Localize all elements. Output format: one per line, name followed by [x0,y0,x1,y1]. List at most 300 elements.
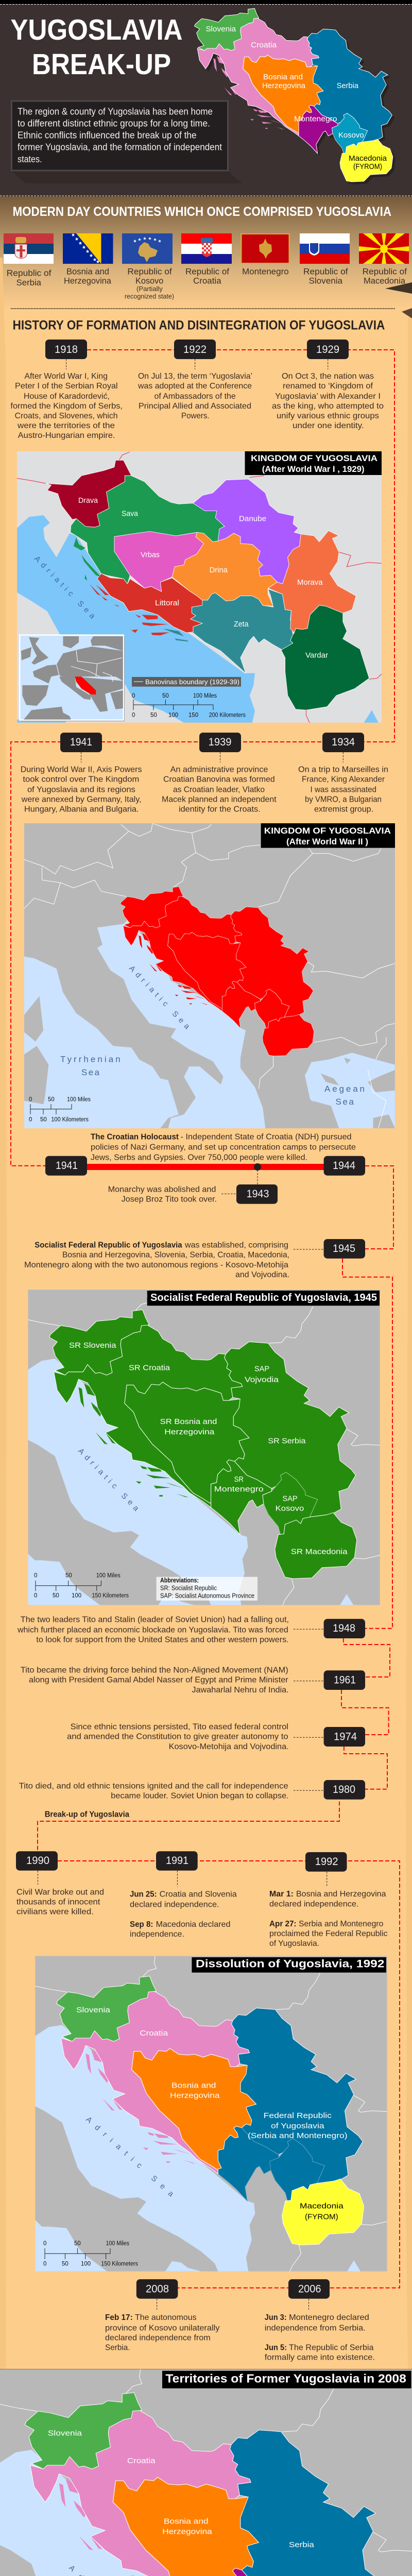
map: Territories of Former Yugoslavia 2008 [0,2369,412,2576]
text 1941 [21,765,142,814]
flag labels: Republic of [185,267,229,277]
top black bar [0,0,412,4]
text 1974: Since ethnic tensions persisted, Tito eased federal control [71,1723,288,1732]
inset: Europe locator [20,635,125,721]
text 2008: Serbia. [105,2343,130,2352]
text 1961: along with President Gamal Abdel Nasser of Egypt and Prime Minister [29,1676,288,1685]
text 1948 [17,1615,289,1644]
text 1929: renamed to ‘Kingdom of [283,382,373,391]
flag labels: Republic of [303,267,348,277]
text 1974 [67,1723,289,1751]
map labels: of Yugoslavia [271,2122,324,2130]
scale bar: 100 [72,1593,81,1599]
scale bar: 0 [29,1117,32,1123]
year 1939: 1939 [209,736,232,748]
map labels: Sava [122,510,139,518]
year 1934: 1934 [332,736,355,748]
panel: hero [0,4,412,196]
scale bar: 0 [29,1097,32,1103]
map labels [48,2429,357,2576]
map title: Socialist Federal Republic of Yugoslavia, 1945 [150,1292,377,1303]
text 1939: Macek planned an independent [162,795,277,804]
year 1918: 1918 [55,344,78,355]
intro text box [11,101,242,183]
text 1948: The two leaders Tito and Stalin (leader of Soviet Union) had a falling out, [21,1615,289,1624]
map title [245,451,382,475]
year 1918 [45,340,87,369]
text 1991 [130,1890,237,1939]
map: modern countries: Herzegovina [262,81,306,90]
year 1943: 1943 [247,1188,269,1200]
map labels: Herzegovina [170,2091,220,2100]
text 1991: Sep 8: [130,1920,153,1929]
text 1990: civilians were killed. [16,1908,94,1917]
sea labels: Aegean [324,1084,365,1094]
map labels: SR Serbia [268,1437,306,1446]
map labels: Vardar [305,651,328,660]
flag labels: Montenegro [242,267,289,277]
map title: KINGDOM OF YUGOSLAVIA [251,453,377,463]
text 2006 [265,2313,375,2362]
flag: Serbia [4,233,54,264]
flag labels: Herzegovina [64,276,112,286]
region: Danube [193,479,301,584]
flag labels: Republic of [363,267,407,277]
map: modern countries: Slovenia [206,25,236,33]
map labels: Herzegovina [162,2527,212,2536]
year 1941: 1941 [56,1160,78,1172]
text 1992: Apr 27: [269,1920,297,1928]
event 1945 [24,1239,365,1279]
event 1961: 1961 [334,1674,356,1686]
year 1929 [307,340,349,369]
text 1992: proclaimed the Federal Republic [269,1929,388,1938]
year 1990 [16,1851,58,1885]
text 1943 [108,1185,217,1204]
title [10,13,183,81]
text 1992: Mar 1: [269,1890,294,1899]
region: Vrbas [114,532,203,591]
year 2008: 2008 [146,2283,169,2295]
sea labels: Adriatic Sea [127,964,192,1031]
scale bar [34,1573,129,1599]
year 1991: 1991 [166,1855,188,1867]
map title: KINGDOM OF YUGOSLAVIA [264,826,391,836]
text 1922 [138,372,252,420]
map: modern countries: Croatia [251,41,277,49]
map labels: SR [234,1475,244,1484]
year 2008 [136,2279,178,2310]
text 2006: formally came into existence. [265,2353,375,2362]
map labels: (Serbia and Montenegro) [248,2131,348,2140]
text 1943: Josep Broz Tito took over. [122,1195,217,1204]
intro text box: states. [18,154,42,164]
text 1918: formed the Kingdom of Serbs, [10,402,123,411]
title: BREAK-UP [32,48,171,81]
year 1991 [156,1851,198,1887]
scale bar: 50 [74,2241,81,2247]
text 1939: Croatian Banovina was formed [163,775,275,784]
sea labels: Sea [81,1067,100,1077]
map: modern countries: Macedonia [349,154,387,163]
year 1922 [174,340,216,369]
text 1943: Monarchy was abolished and [108,1185,216,1194]
year 1944: 1944 [333,1160,355,1172]
heading: history: HISTORY OF FORMATION AND DISINTEGRATION OF YUGOSLAVIA [12,318,385,332]
year 1922: 1922 [183,344,207,355]
text 1945 [24,1241,289,1279]
scale bar: 100 [81,2261,91,2267]
text 1939: identity for the Croats. [179,805,261,814]
scale bar: 50 [40,1117,47,1123]
text 1992: declared independence. [269,1900,358,1909]
text 1991: Macedonia declared [156,1920,230,1929]
flags row [4,233,409,264]
text 1934: On a trip to Marseilles in [298,765,388,774]
map labels: Danube [239,515,266,523]
text 1939: as Croatian leader, Vlatko [173,785,265,794]
text 1934: I was assassinated [310,785,376,794]
scale bar: 0 [34,1593,37,1599]
events 1941 1944 1943 [45,1156,365,1204]
map: modern countries [195,8,396,184]
scale bar: 150 Kilometers [92,1593,129,1599]
text 1929: unify various ethnic groups [277,412,379,420]
map labels: Adriatic Sea [76,1447,141,1513]
map labels: SAP [254,1365,269,1374]
map labels [32,496,328,660]
text 2008: The autonomous [135,2313,197,2322]
map title [192,1957,386,1973]
text 1945: and Vojvodina. [235,1270,289,1279]
sea labels: Tyrrhenian [60,1055,121,1064]
legend: Banovinas boundary [132,677,241,687]
map title: (After World War I , 1929) [262,464,365,474]
map: modern countries: Bosnia and [263,73,303,81]
timeline connector: red dashed path [11,350,400,2288]
text 2008 [105,2313,219,2352]
text 1945: Socialist Federal Republic of Yugoslavia [35,1241,182,1250]
year 1992: 1992 [315,1856,338,1868]
flag labels: Slovenia [309,276,343,286]
abbreviations box: SAP: Socialist Autonomous Province [160,1592,254,1600]
scale bar: 100 Miles [96,1573,121,1579]
text 2006: independence from Serbia. [265,2324,366,2332]
year 2006: 2006 [298,2283,321,2295]
map labels: Zeta [234,620,249,629]
text 1934: extremist group. [314,805,373,814]
year 1939 [199,733,241,762]
text 1918: After World War I, King [24,372,108,381]
map labels: Bosnia and [164,2517,209,2526]
text 1922: On Jul 13, the term ‘Yugoslavia’ [138,372,252,381]
text 1980: became louder. Soviet Union began to collapse. [111,1792,289,1801]
map: modern countries: Serbia [337,81,359,90]
text 1941: of Yugoslavia and its regions [27,785,135,794]
text 1992: Bosnia and Herzegovina [296,1890,386,1899]
text 1918: Peter I of the Serbian Royal [15,382,118,391]
text 2006: Jun 5: [265,2343,287,2352]
text 2006: The Republic of Serbia [289,2343,374,2352]
region: Zeta [186,589,293,673]
scale bar: 200 Kilometers [209,713,246,719]
sea labels: Sea [336,1097,354,1107]
event 1974: 1974 [334,1731,357,1742]
text 1945: Bosnia and Herzegovina, Slovenia, Serbia, Croatia, Macedonia, [62,1251,289,1260]
flag labels: Kosovo [135,276,163,286]
scale bar: 100 Miles [106,2241,129,2247]
map labels: Slovenia [48,2429,82,2437]
region: Drava [46,460,131,527]
scale bar: 150 Kilometers [101,2261,138,2267]
map labels: Macedonia [300,2202,344,2211]
text 2008: province of Kosovo unilaterally [105,2324,219,2332]
scale bar: 50 [62,2261,68,2267]
scale bar [29,1097,91,1123]
event 1980: 1980 [333,1784,355,1795]
text 1991: Croatia and Slovenia [160,1890,237,1899]
flag labels: recognized state) [125,292,174,300]
flag labels: Bosnia and [66,267,109,277]
year 1929: 1929 [316,344,339,355]
scale bar: 50 [65,1573,72,1579]
text 1941: Hungary, Albania and Bulgaria. [24,805,139,814]
text 1941: took control over The Kingdom [23,775,139,784]
text 2008: Feb 17: [105,2313,133,2322]
Yugoslavia in red [121,887,314,1056]
map title [261,823,395,848]
region: Littoral [97,573,202,633]
scale bar: 0 [43,2261,46,2267]
map labels: Vojvodia [245,1375,279,1384]
scale bar: 100 [168,713,178,719]
event 1980 [19,1780,365,1801]
map labels: Montenegro [214,1485,264,1494]
text 1990: thousands of innocent [16,1898,100,1907]
text 1934: by VMRO, a Bulgarian [305,795,382,804]
scale bar: 50 [53,1593,59,1599]
text 1922: of Ambassadors of the [154,392,236,401]
map: modern countries: (FYROM) [353,162,382,171]
map: Kingdom of Yugoslavia after WWII [24,823,395,1128]
map labels [69,1341,348,1556]
text 2006: Montenegro declared [289,2313,369,2322]
map: Socialist Federal Republic 1945 [28,1290,380,1605]
scale bar [132,693,246,719]
text 1929: Yugoslavia’ with Alexander I [275,392,381,401]
text 1980: Tito died, and old ethnic tensions ignited and the call for independence [19,1782,288,1791]
text 1990 [16,1888,104,1917]
abbreviations box: SR: Socialist Republic [160,1584,217,1592]
text: Croatian Holocaust: Jews, Serbs and Gypsies. Over 750,000 people were killed. [91,1153,307,1162]
events 1941 to 1934 [21,733,388,814]
map labels: Slovenia [76,2006,111,2014]
map: Kingdom of Yugoslavia after WWI [17,451,382,723]
map labels: SR Bosnia and [160,1417,217,1426]
text 1918: Austro-Hungarian empire. [18,431,115,440]
text: Croatian Holocaust: policies of Nazi Germany, and set up concentration camps to persecute [91,1143,356,1152]
scale bar: 100 Miles [193,693,217,699]
intro text box: The region & county of Yugoslavia has been home [18,107,213,117]
text 1974: Kosovo-Metohija and Vojvodina. [169,1742,289,1751]
map labels: Herzegovina [164,1428,215,1436]
map labels: SR Croatia [129,1363,170,1372]
scale bar: 50 [48,1097,55,1103]
text 1941: were annexed by Germany, Italy, [21,795,141,804]
map labels: Adriatic Sea [32,554,97,621]
text 1934: France, King Alexander [302,775,385,784]
map labels: Drina [210,566,228,574]
text 1929: under one identity. [293,421,364,430]
region: Drina [172,532,277,606]
text 1939 [162,765,277,814]
text 2006: Jun 3: [265,2313,287,2322]
text: Croatian Holocaust: The Croatian Holocaust [91,1133,179,1142]
sea labels [60,964,365,1107]
map labels: Croatia [127,2456,156,2465]
flag: Kosovo [122,233,173,264]
map: Dissolution of Yugoslavia 1992 [35,1956,387,2272]
map title: (After World War II ) [286,837,368,846]
map labels: SAP [282,1495,298,1503]
text 1939: An administrative province [170,765,268,774]
year 1990: 1990 [26,1855,49,1867]
event 1948 [17,1615,365,1644]
text 1991: declared independence. [130,1901,219,1909]
intro text box: former Yugoslavia, and the formation of independent [18,142,222,152]
region: Sava [71,476,225,584]
text 1941: During World War II, Axis Powers [21,765,142,774]
intro text box: Ethnic conflicts influenced the break up of the [18,130,197,141]
map labels: SR Macedonia [291,1548,348,1556]
map labels: Drava [78,496,98,505]
text 1992: Serbia and Montenegro [299,1920,383,1928]
text 1974: and amended the Constitution to give greater autonomy to [67,1733,288,1741]
text 1922: was adopted at the Conference [138,382,252,391]
scale bar: 100 Miles [67,1097,91,1103]
scale bar [43,2241,138,2267]
text 1922: Principal Allied and Associated [139,402,251,411]
title: YUGOSLAVIA [10,13,183,46]
year 1934 [322,733,364,762]
text 1918: Croats, and Slovenes, which [15,412,118,420]
map: modern countries: Montenegro [294,115,337,124]
marker dot [254,1163,261,1171]
flag labels: Republic of [7,268,52,278]
region: Morava [268,531,356,633]
text 1961 [21,1666,289,1694]
event 1961 [21,1666,365,1694]
flag labels: (Partially [136,285,163,293]
map labels: Morava [297,578,323,587]
map labels: Kosovo [276,1504,304,1513]
text 1948: to look for support from the United States and other western powers. [36,1635,289,1644]
year 1944 [324,1156,365,1176]
flag: Montenegro [241,233,290,264]
flag labels: Macedonia [364,276,406,286]
text 1922: Powers. [181,412,210,420]
events 1918 to 1929 [10,340,384,440]
text: Croatian Holocaust: - Independent State of Croatia (NDH) pursued [180,1133,352,1142]
label: break-up: Break-up of Yugoslavia [45,1810,129,1819]
region: Vardar [281,605,369,710]
map: modern countries: Kosovo [338,131,364,140]
text 1992: of Yugoslavia. [269,1939,319,1948]
map labels [76,2006,348,2221]
map title: Dissolution of Yugoslavia, 1992 [196,1958,384,1970]
map labels: SR Slovenia [69,1341,116,1350]
year 1943 [236,1184,278,1204]
flag labels [7,267,407,300]
text 1918: House of Karadordević, [24,392,110,401]
scale bar: 100 Kilometers [52,1117,89,1123]
scale bar: 0 [43,2241,46,2247]
map title: Territories of Former Yugoslavia in 2008 [165,2371,406,2385]
text 1918: were the territories of the [17,421,115,430]
abbreviations box [157,1577,258,1601]
flag: Macedonia [359,233,409,264]
scale bar: 0 [34,1573,37,1579]
scale bar: 0 [132,693,135,699]
text 1991: Jun 25: [130,1890,157,1899]
map labels: Federal Republic [264,2111,332,2120]
text 1961: Jawaharlal Nehru of India. [192,1686,289,1694]
scale bar: 50 [150,713,157,719]
scale bar: 0 [132,713,135,719]
text 1945: was established, comprising [184,1241,288,1250]
abbreviations box: Abbreviations: [160,1577,199,1584]
year 1941 [60,733,102,762]
text 1929: On Oct 3, the nation was [282,372,374,381]
text 1929: as the king, who attempted to [272,402,384,411]
map labels: Bosnia and [171,2081,216,2090]
text 1929 [272,372,384,430]
text 1980 [19,1782,289,1801]
map labels: (FYROM) [305,2212,338,2221]
scale bar: 50 [162,693,169,699]
year 1941 [45,1156,87,1176]
text 1948: which further placed an economic blockade on Yugoslavia. Tito was forced [17,1625,288,1634]
event 1948: 1948 [333,1622,355,1634]
map title [162,2371,411,2388]
flag labels: Republic of [127,267,172,277]
map labels: Serbia [289,2540,314,2549]
text 1961: Tito became the driving force behind the Non-Aligned Movement (NAM) [21,1666,288,1675]
text 1991: independence. [130,1930,184,1939]
text 1934 [298,765,388,814]
scale bar: 150 [188,713,198,719]
events 1990 to 1992 [16,1851,388,1948]
flag labels: Serbia [16,278,42,287]
year 2006 [288,2279,330,2310]
flag: Slovenia [300,233,350,264]
text: Croatian Holocaust [91,1133,356,1162]
text 1992 [269,1890,388,1948]
map labels: Croatia [140,2029,168,2038]
map labels: Vrbas [141,551,160,560]
flag: Croatia [181,233,232,264]
flag labels: Croatia [193,276,221,286]
text 1990: Civil War broke out and [16,1888,104,1897]
event 1974 [67,1723,365,1751]
year 1992 [305,1852,347,1887]
text 1918 [10,372,123,440]
year 1941: 1941 [70,736,92,748]
legend: Banovinas boundary: Banovinas boundary (1929-39) [145,678,239,686]
events 2008 and 2006 [105,2279,375,2362]
event 1945: 1945 [333,1243,355,1255]
map labels: Littoral [155,599,179,607]
